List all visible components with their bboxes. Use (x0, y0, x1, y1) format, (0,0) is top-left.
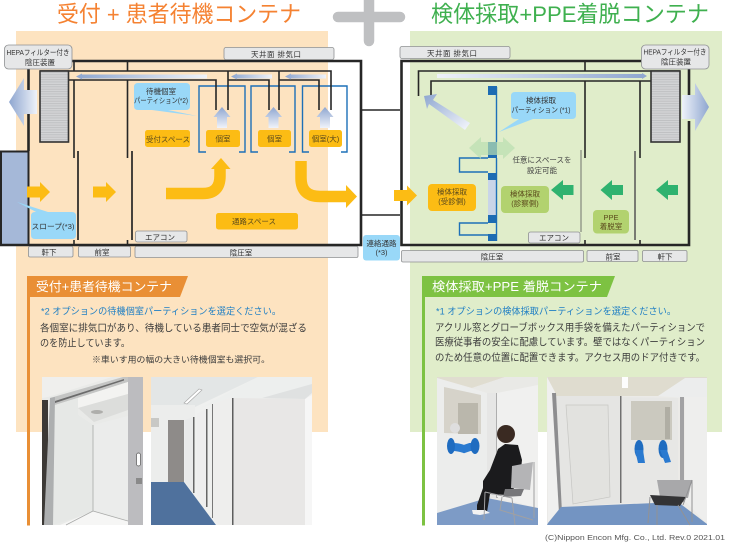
title: right: 検体採取+PPE着脱コンテナ (431, 2, 709, 27)
panel: right background (410, 31, 722, 432)
floor plan: right container: 検体採取 (437, 186, 467, 196)
option note: *2 オプションの待機個室パーティションを選定ください。 (41, 306, 281, 318)
HEPA filter unit (651, 71, 680, 142)
duct airflow arrows (76, 74, 207, 80)
label: negative pressure room (135, 246, 358, 258)
arrows: room exhaust up (214, 107, 230, 128)
floor plan: right container: (受診側) (438, 196, 466, 206)
room labels (428, 184, 476, 211)
text: adjustable space note: 任意にスペースを (512, 154, 572, 164)
floor plan: left container: エアコン (145, 233, 175, 242)
copyright: (C)Nippon Encon Mfg. Co., Ltd. Rev.0 2021.01 (545, 533, 725, 542)
section: left description (27, 276, 307, 526)
heading tab (27, 276, 188, 297)
icon: large grey plus (338, 0, 400, 41)
floor plan: left container: 個室 (216, 134, 231, 144)
photo: waiting room corridor (151, 377, 312, 525)
arrows: green flow (551, 180, 574, 200)
heading text: 検体採取+PPE 着脱コンテナ (432, 279, 602, 294)
floor plan: right container: 陰圧装置 (661, 56, 691, 66)
floor plan: right container: HEPAフィルター付き (644, 46, 706, 56)
building walls (0, 61, 361, 245)
floor plan: right container: 陰圧室 (481, 252, 504, 262)
building walls (402, 61, 689, 245)
callout: connecting passage: 連絡通路 (366, 238, 397, 248)
label: negative pressure room (402, 250, 584, 262)
text: adjustable space note: 設定可能 (527, 165, 557, 175)
floor plan: left container (0, 45, 400, 258)
body text: アクリル窓とグローブボックス用手袋を備えたパーティションで (435, 321, 705, 334)
label: ceiling exhaust (400, 46, 510, 58)
title: left: 受付 + 患者待機コンテナ (57, 2, 301, 27)
arrow: yellow inbound (394, 186, 417, 206)
label: ceiling exhaust (224, 48, 334, 60)
floor plan: right container: 検体採取 (510, 188, 540, 198)
interior walls (585, 61, 640, 245)
floor plan: left container: 通路スペース (232, 216, 276, 226)
label: air conditioner (136, 231, 187, 242)
floor plan: left container: スロープ(*3) (32, 222, 75, 231)
option note: *1 オプションの検体採取パーティションを選定ください。 (436, 306, 676, 318)
yellow flow arrows (27, 182, 50, 202)
floor plan: left container: 前室 (94, 247, 110, 257)
exhaust duct (40, 71, 331, 110)
floor plan: right container: 着脱室 (600, 221, 623, 231)
exhaust duct (418, 71, 680, 96)
label: anteroom (78, 246, 130, 257)
floor plan: left container: 個室 (267, 134, 282, 144)
room labels (145, 130, 190, 147)
panel: left background (16, 31, 328, 432)
ramp (1, 152, 28, 245)
heading tab (422, 276, 615, 297)
section: left description: のを防止しています。 (40, 336, 130, 350)
floor plan: right container: 軒下 (658, 252, 673, 262)
callout: slope (17, 202, 76, 239)
floor plan: right container: 検体採取 (526, 95, 556, 105)
photo: waiting room interior (42, 377, 143, 525)
photo: partition with chair (547, 377, 707, 525)
floor plan: right container (394, 45, 709, 262)
partition: sampling (460, 86, 497, 241)
floor plan: right container: (診察側) (511, 198, 539, 208)
callout: connecting passage (363, 235, 400, 260)
section: right description: のため任意の位置に配置できます。アクセス用のドア付きです。 (435, 351, 705, 364)
arrow: exhaust out left (9, 78, 37, 126)
floor plan: right container: 天井面 排気口 (427, 48, 477, 58)
callout: waiting partition (134, 83, 197, 116)
floor plan: left container: 天井面 排気口 (251, 49, 301, 59)
floor plan: right container: PPE (603, 213, 619, 222)
label: eaves (28, 246, 73, 257)
floor plan: left container: 待機個室 (146, 86, 176, 96)
floor plan: right container: 前室 (606, 252, 621, 262)
heading strip (27, 290, 30, 526)
arrow: adjustable position (469, 137, 515, 159)
heading text: 受付+患者待機コンテナ (36, 280, 172, 294)
label: anteroom (587, 250, 638, 262)
duct airflow arrow (437, 73, 647, 79)
floor plan: left container: 個室(大) (312, 134, 340, 144)
partitions: waiting rooms (199, 86, 347, 152)
floor plan: left container: 陰圧装置 (25, 57, 55, 67)
HEPA filter unit (40, 71, 68, 142)
text: adjustable space note (512, 154, 572, 175)
body text: 各個室に排気口があり、待機している患者同士で空気が混ざる (40, 322, 307, 334)
floor plan: right container: エアコン (539, 234, 569, 242)
label: eaves (642, 250, 687, 262)
floor plan: left container: 受付スペース (146, 134, 190, 144)
floor plan: left container: HEPAフィルター付き (6, 47, 70, 57)
callout: sampling partition (499, 92, 576, 132)
wheelchair note: ※車いす用の幅の大きい待機個室も選択可。 (92, 354, 270, 364)
interior walls (74, 61, 400, 245)
label: HEPA unit (642, 45, 709, 69)
section: right description (422, 276, 705, 526)
floor plan: right container: パーティション (*1) (512, 106, 571, 114)
label: HEPA unit (4, 45, 72, 69)
callout: connecting passage: (*3) (375, 248, 388, 257)
section: right description: 医療従事者の安全に配慮しています。壁ではなくパーティション (435, 336, 705, 348)
floor plan: left container: 軒下 (42, 248, 57, 257)
arrow: diagonal airflow (424, 94, 470, 130)
floor plan: left container: 陰圧室 (230, 248, 253, 258)
heading strip (422, 290, 425, 526)
floor plan: left container: パーティション(*2) (134, 96, 188, 105)
label: air conditioner (528, 232, 580, 243)
arrow: exhaust out right (682, 83, 709, 131)
photo: seated patient at glove box (437, 377, 538, 525)
